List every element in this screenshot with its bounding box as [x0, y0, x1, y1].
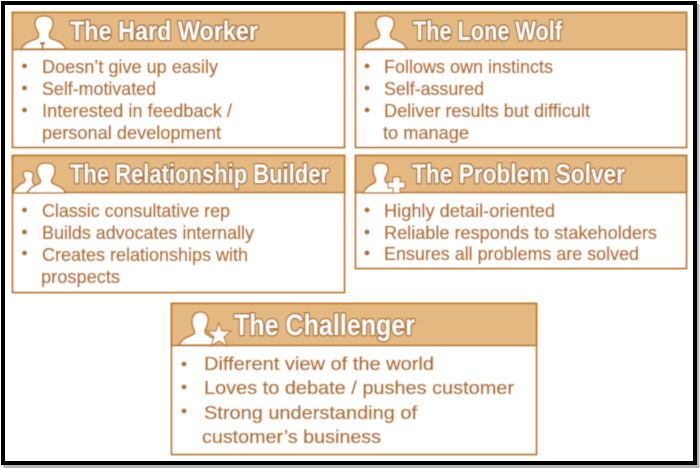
heading: The Hard Worker — [70, 16, 258, 46]
panel: The Lone Wolf — [356, 12, 686, 148]
bullet list: customer’s business — [202, 427, 381, 447]
bullet list: Ensures all problems are solved — [384, 244, 639, 264]
bullet list: to manage — [383, 123, 469, 143]
bullet list — [364, 201, 657, 264]
bullet list: prospects — [41, 267, 120, 287]
bullet list — [22, 201, 254, 287]
header band — [12, 156, 344, 192]
icon: person with tie — [21, 16, 66, 49]
panel: The Problem Solver — [356, 156, 686, 268]
panel: The Challenger — [172, 304, 536, 454]
header band — [356, 12, 686, 50]
icon: person — [362, 16, 407, 49]
bullet list — [182, 354, 514, 447]
panel: The Relationship Builder — [12, 156, 344, 292]
bullet list: Highly detail-oriented — [384, 201, 555, 221]
bullet list: Creates relationships with — [42, 245, 248, 265]
heading: The Lone Wolf — [413, 16, 563, 46]
header band — [172, 304, 536, 346]
bullet list: Builds advocates internally — [42, 223, 254, 243]
bullet list: Self-assured — [384, 79, 484, 99]
bullet list: Self-motivated — [42, 79, 156, 99]
bullet list: Different view of the world — [204, 354, 434, 374]
bullet list — [364, 57, 590, 143]
bullet list — [22, 57, 232, 143]
icon: person with star — [179, 312, 231, 346]
heading: The Problem Solver — [412, 159, 625, 189]
header band — [12, 12, 344, 50]
heading: The Relationship Builder — [70, 159, 329, 189]
bullet list: personal development — [42, 123, 221, 143]
heading: The Challenger — [234, 309, 415, 342]
panel: The Hard Worker — [12, 12, 344, 148]
header band — [356, 156, 686, 192]
bullet list: Loves to debate / pushes customer — [204, 378, 514, 398]
bullet list: Follows own instincts — [384, 57, 553, 77]
bullet list: Deliver results but difficult — [384, 101, 590, 121]
bullet list: Doesn’t give up easily — [42, 57, 218, 77]
bullet list: Reliable responds to stakeholders — [384, 223, 657, 243]
bullet list: Interested in feedback / — [42, 101, 232, 121]
icon: two people — [13, 163, 66, 193]
bullet list: Strong understanding of — [204, 403, 418, 423]
bullet list: Classic consultative rep — [42, 201, 230, 221]
icon: person with plus — [363, 163, 405, 193]
